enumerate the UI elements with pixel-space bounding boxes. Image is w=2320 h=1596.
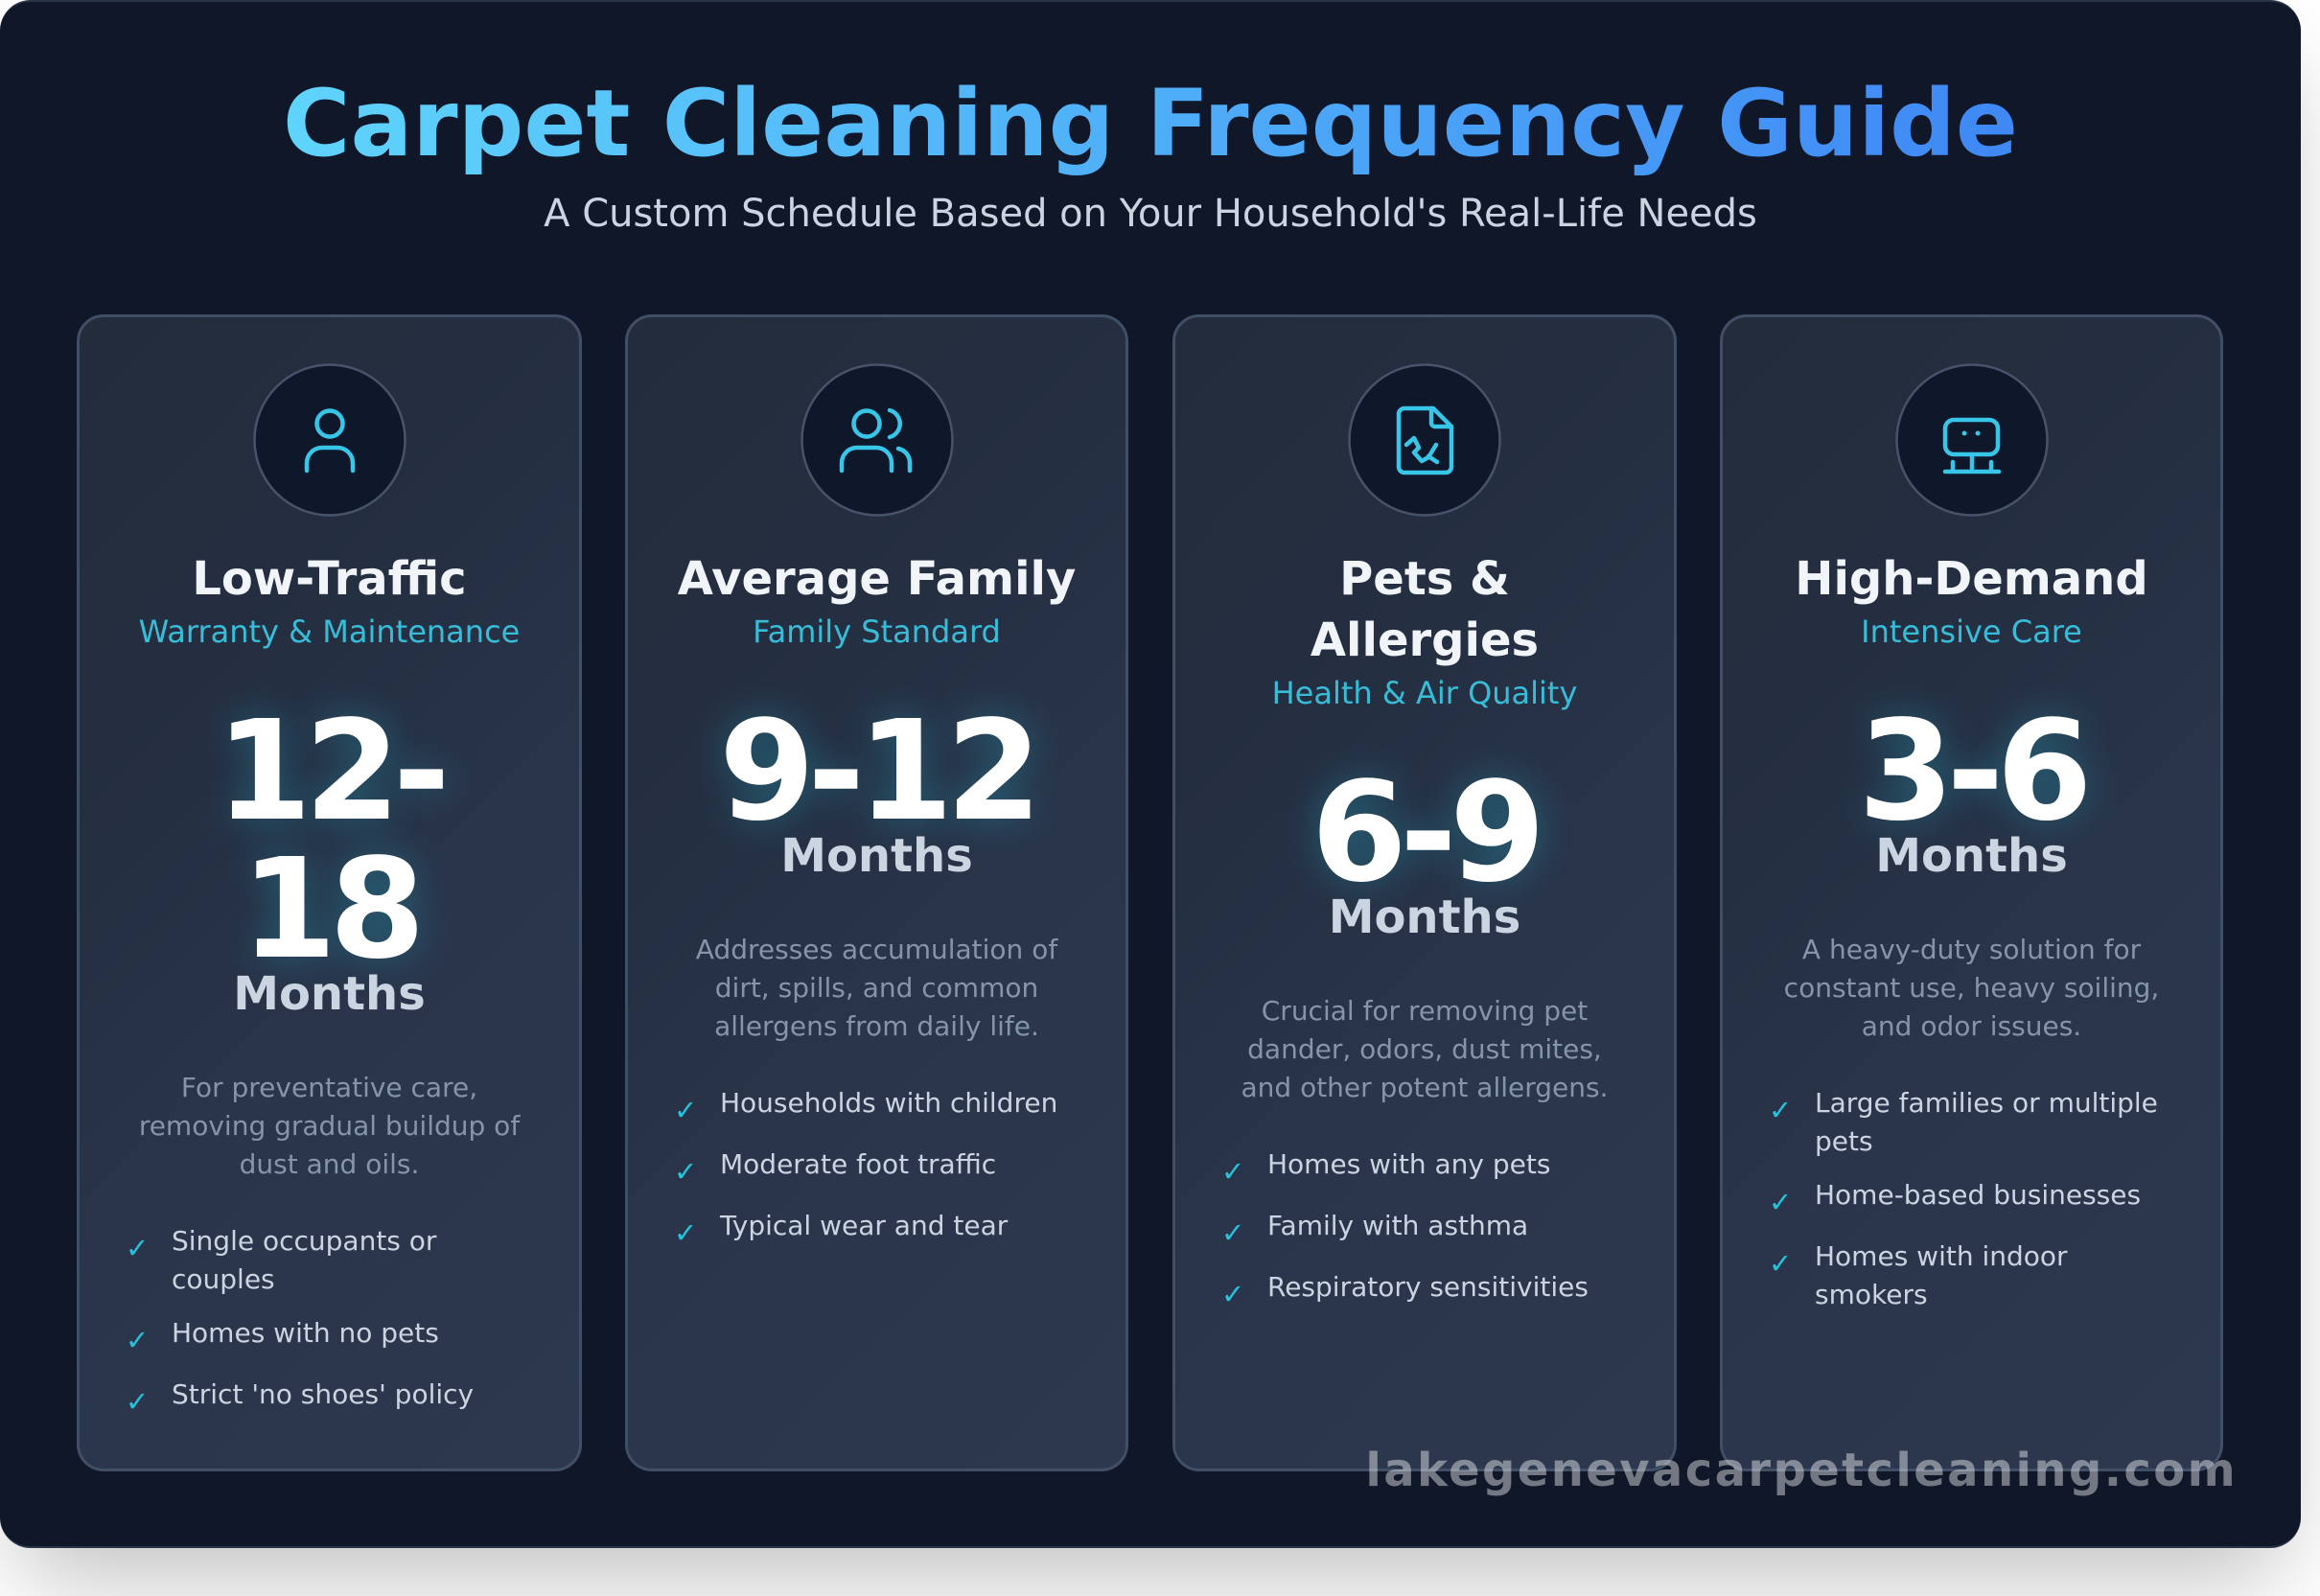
checklist: ✓ [1221, 1278, 1244, 1310]
checklist: ✓ [1221, 1155, 1244, 1188]
panel: average family [625, 314, 1128, 1471]
frequency number: 18 [241, 828, 418, 989]
description: Crucial for removing pet dander, odors, dust mites, and other potent allergens. [1241, 995, 1609, 1102]
checklist: ✓ [1769, 1247, 1792, 1280]
checklist: Respiratory sensitivities [1267, 1271, 1589, 1302]
checklist: ✓ [1769, 1094, 1792, 1126]
frequency number [216, 690, 445, 989]
months label: Months [233, 966, 426, 1020]
frequency number: 3-6 [1858, 690, 2085, 851]
card tagline: Warranty & Maintenance [139, 613, 520, 650]
checklist: Homes with no pets [172, 1317, 439, 1348]
panel: pets and allergies [1172, 314, 1677, 1471]
description: For preventative care, removing gradual buildup of dust and oils. [139, 1072, 520, 1179]
card heading: High-Demand [1795, 552, 2148, 606]
checklist: ✓ [674, 1216, 697, 1249]
card heading: Low-Traffic [192, 552, 467, 606]
four frequency cards [77, 314, 2223, 1471]
months label: Months [1875, 828, 2068, 882]
checklist [1221, 1148, 1589, 1310]
card heading: Pets & [1339, 552, 1510, 606]
icon: machine on stand [1895, 363, 2049, 517]
checklist: ✓ [1221, 1216, 1244, 1249]
checklist [126, 1225, 474, 1418]
checklist: ✓ [674, 1094, 697, 1126]
icon: document with signature [1348, 363, 1501, 517]
card tagline: Intensive Care [1861, 613, 2082, 650]
checklist: ✓ [126, 1324, 149, 1356]
checklist: Large families or multiple pets [1815, 1087, 2158, 1156]
checklist: Moderate foot traffic [720, 1148, 996, 1179]
checklist: Single occupants or couples [172, 1225, 436, 1294]
checklist: Home-based businesses [1815, 1179, 2141, 1210]
months label: Months [1329, 890, 1520, 943]
checklist [1769, 1087, 2158, 1309]
months label: Months [780, 828, 973, 882]
checklist: Strict 'no shoes' policy [172, 1378, 474, 1409]
checklist: ✓ [1769, 1186, 1792, 1218]
checklist: Homes with indoor smokers [1815, 1240, 2068, 1309]
frequency number: 9-12 [719, 690, 1034, 851]
title: Carpet Cleaning Frequency Guide [283, 70, 2018, 177]
checklist: ✓ [126, 1232, 149, 1264]
icon: two people [800, 363, 954, 517]
checklist: Typical wear and tear [720, 1210, 1008, 1240]
frequency number: 12- [216, 690, 443, 851]
checklist: ✓ [126, 1385, 149, 1418]
panel: high-demand [1720, 314, 2223, 1471]
frequency number: 6-9 [1311, 752, 1538, 913]
card heading: Average Family [678, 552, 1076, 606]
checklist: ✓ [674, 1155, 697, 1188]
card tagline: Family Standard [753, 613, 1001, 650]
checklist: Homes with any pets [1267, 1148, 1550, 1179]
description: A heavy-duty solution for constant use, heavy soiling, and odor issues. [1784, 934, 2159, 1041]
checklist: Family with asthma [1267, 1210, 1528, 1240]
panel: low-traffic [77, 314, 582, 1471]
card heading [1311, 552, 1539, 667]
watermark: lakegenevacarpetcleaning.com [1365, 1444, 2238, 1497]
card tagline: Health & Air Quality [1272, 675, 1577, 711]
checklist [674, 1087, 1057, 1249]
subtitle: A Custom Schedule Based on Your Household's Real-Life Needs [544, 192, 1757, 236]
icon: single person [253, 363, 406, 517]
description: Addresses accumulation of dirt, spills, and common allergens from daily life. [696, 934, 1057, 1041]
checklist: Households with children [720, 1087, 1057, 1118]
card heading: Allergies [1311, 613, 1539, 667]
